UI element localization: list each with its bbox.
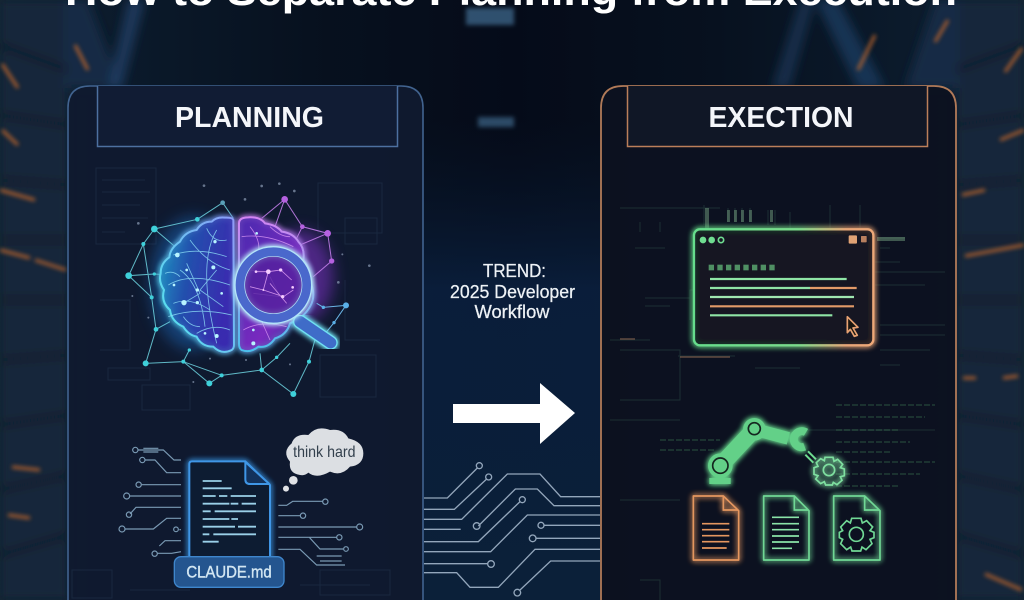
planning heading: [98, 86, 398, 146]
right hemisphere: [239, 217, 313, 351]
trend label: Workflow: [474, 301, 550, 322]
panel: planning: [68, 86, 423, 600]
planning heading: PLANNING: [175, 102, 324, 134]
arrow: planning to execution: [453, 383, 575, 444]
icon: orange document: [693, 496, 739, 560]
execution heading: EXECTION: [708, 102, 854, 134]
document text lines: [203, 481, 256, 542]
circuit traces between panels: [424, 463, 600, 596]
icon: CLAUDE.md document with circuit traces: [119, 428, 363, 587]
icon: robotic arm: [693, 418, 880, 560]
network lines: [129, 203, 317, 394]
gear: [814, 457, 844, 485]
CLAUDE.md label: [174, 557, 284, 587]
magnifier ring: [240, 252, 307, 318]
CLAUDE.md label: CLAUDE.md: [186, 563, 272, 582]
left hemisphere: [160, 217, 234, 352]
planning panel card: [68, 86, 423, 600]
execution heading: [628, 86, 928, 146]
icon: green document: [764, 496, 809, 560]
left circuit traces: [119, 447, 181, 556]
right circuit traces: [278, 499, 363, 565]
icon: code window: [694, 229, 873, 345]
icon: brain with magnifying glass: [125, 182, 371, 397]
trend label: 2025 Developer: [450, 281, 575, 302]
faint code backdrop: [610, 205, 945, 600]
icon: gear document: [834, 496, 880, 560]
magnifier handle: [300, 322, 331, 343]
thought bubble: think hard: [283, 428, 363, 492]
document: [189, 461, 270, 560]
faint schematic backdrop: [72, 168, 390, 598]
panel: execution: [601, 86, 956, 600]
trend label: TREND:: [483, 260, 546, 281]
thought bubble: think hard: think hard: [293, 444, 355, 461]
trend label: [450, 260, 575, 322]
neural detail: [165, 228, 232, 343]
execution panel card: [601, 86, 956, 600]
network nodes: [125, 200, 311, 397]
